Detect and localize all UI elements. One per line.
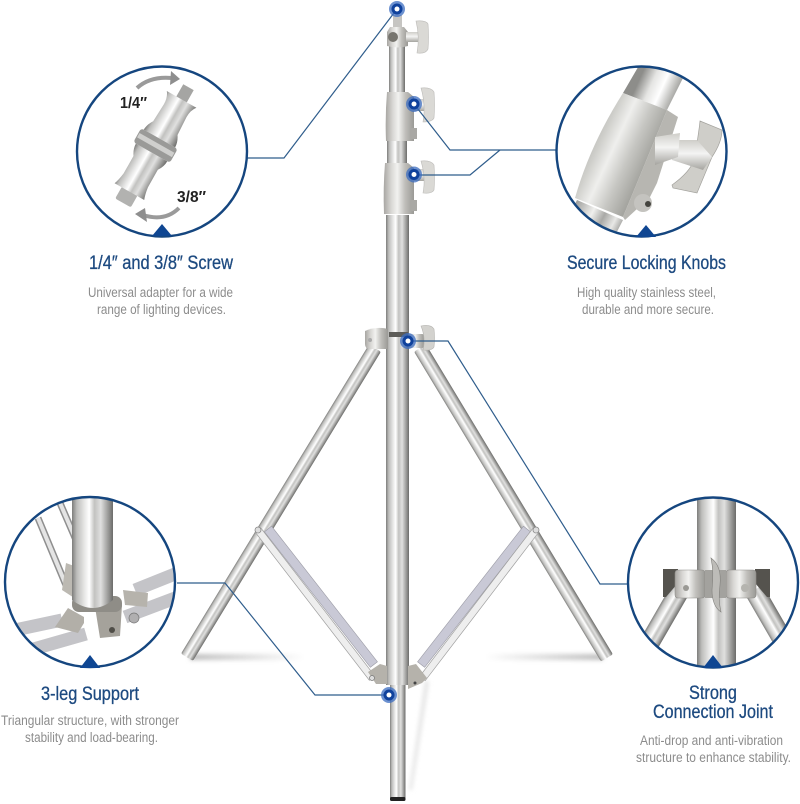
rubber foot [390, 797, 406, 801]
circle outline [628, 498, 798, 668]
description: Triangular structure, with stronger [1, 713, 179, 728]
clamp plates [675, 570, 705, 598]
panel: locking knobs [555, 50, 726, 317]
pointer triangle [80, 655, 100, 668]
column [72, 490, 113, 608]
knob wing [672, 121, 722, 193]
pointer triangle [152, 224, 172, 236]
arrow: top [137, 71, 180, 88]
upper tube [623, 68, 683, 110]
description: High quality stainless steel, [577, 285, 716, 300]
small bolts [410, 128, 417, 211]
knob 3 [412, 161, 434, 193]
heading: 1/4″ and 3/8″ Screw [89, 253, 233, 274]
lower hub [368, 664, 427, 689]
description: Universal adapter for a wide [88, 285, 233, 300]
hex bolt [634, 194, 652, 212]
left leg [181, 344, 381, 661]
description: durable and more secure. [582, 302, 714, 317]
light stand [181, 15, 613, 801]
knob 2 [412, 88, 434, 122]
circle content: spreader [17, 498, 174, 652]
panel: screw adapter [77, 66, 247, 317]
hinge [705, 570, 726, 598]
column [697, 490, 736, 670]
description: stability and load-bearing. [25, 730, 158, 745]
label: 3/8 inch: 3/8″ [177, 189, 206, 206]
knob stem [672, 140, 712, 170]
panel: connection joint [628, 490, 800, 765]
circle content: joint [644, 499, 786, 666]
circle outline [5, 497, 175, 667]
legs [644, 587, 687, 646]
heading: Connection Joint [653, 702, 774, 723]
pointer triangle [703, 655, 723, 668]
circle content: adapter [114, 71, 196, 222]
lower column [390, 670, 406, 798]
leader lines [177, 9, 628, 695]
knob neck [655, 133, 680, 165]
right brace [418, 526, 539, 681]
heading: Secure Locking Knobs [567, 253, 726, 274]
bars [15, 572, 180, 650]
description: range of lighting devices. [97, 302, 226, 317]
rods [38, 503, 76, 590]
clamp pieces [62, 563, 72, 596]
heading: 3-leg Support [41, 684, 140, 705]
left brace [255, 526, 377, 680]
label: 1/4 inch: 1/4″ [120, 95, 147, 112]
top tube [389, 45, 405, 95]
description: Anti-drop and anti-vibration [640, 733, 783, 748]
dark corners [663, 569, 678, 597]
ground shadows [190, 654, 603, 790]
callout dots [381, 1, 422, 703]
circle content: knob closeup [575, 68, 722, 232]
mid tube [387, 140, 407, 166]
circle outline [77, 66, 247, 236]
main column [386, 215, 409, 685]
collar 2 [386, 92, 414, 141]
leg hub [365, 325, 434, 350]
side plate [623, 110, 678, 220]
pointer triangle [636, 225, 656, 237]
heading: Strong [689, 683, 737, 704]
arrow: bottom [135, 208, 179, 222]
crescent latch [711, 558, 721, 612]
lower tube [576, 200, 623, 232]
panel: 3-leg support [1, 490, 180, 745]
top head [387, 15, 428, 53]
icon: spigot [114, 84, 196, 207]
right leg [414, 344, 613, 662]
collar body [575, 93, 667, 217]
collar 3 [384, 163, 414, 214]
circle outline [556, 66, 726, 236]
